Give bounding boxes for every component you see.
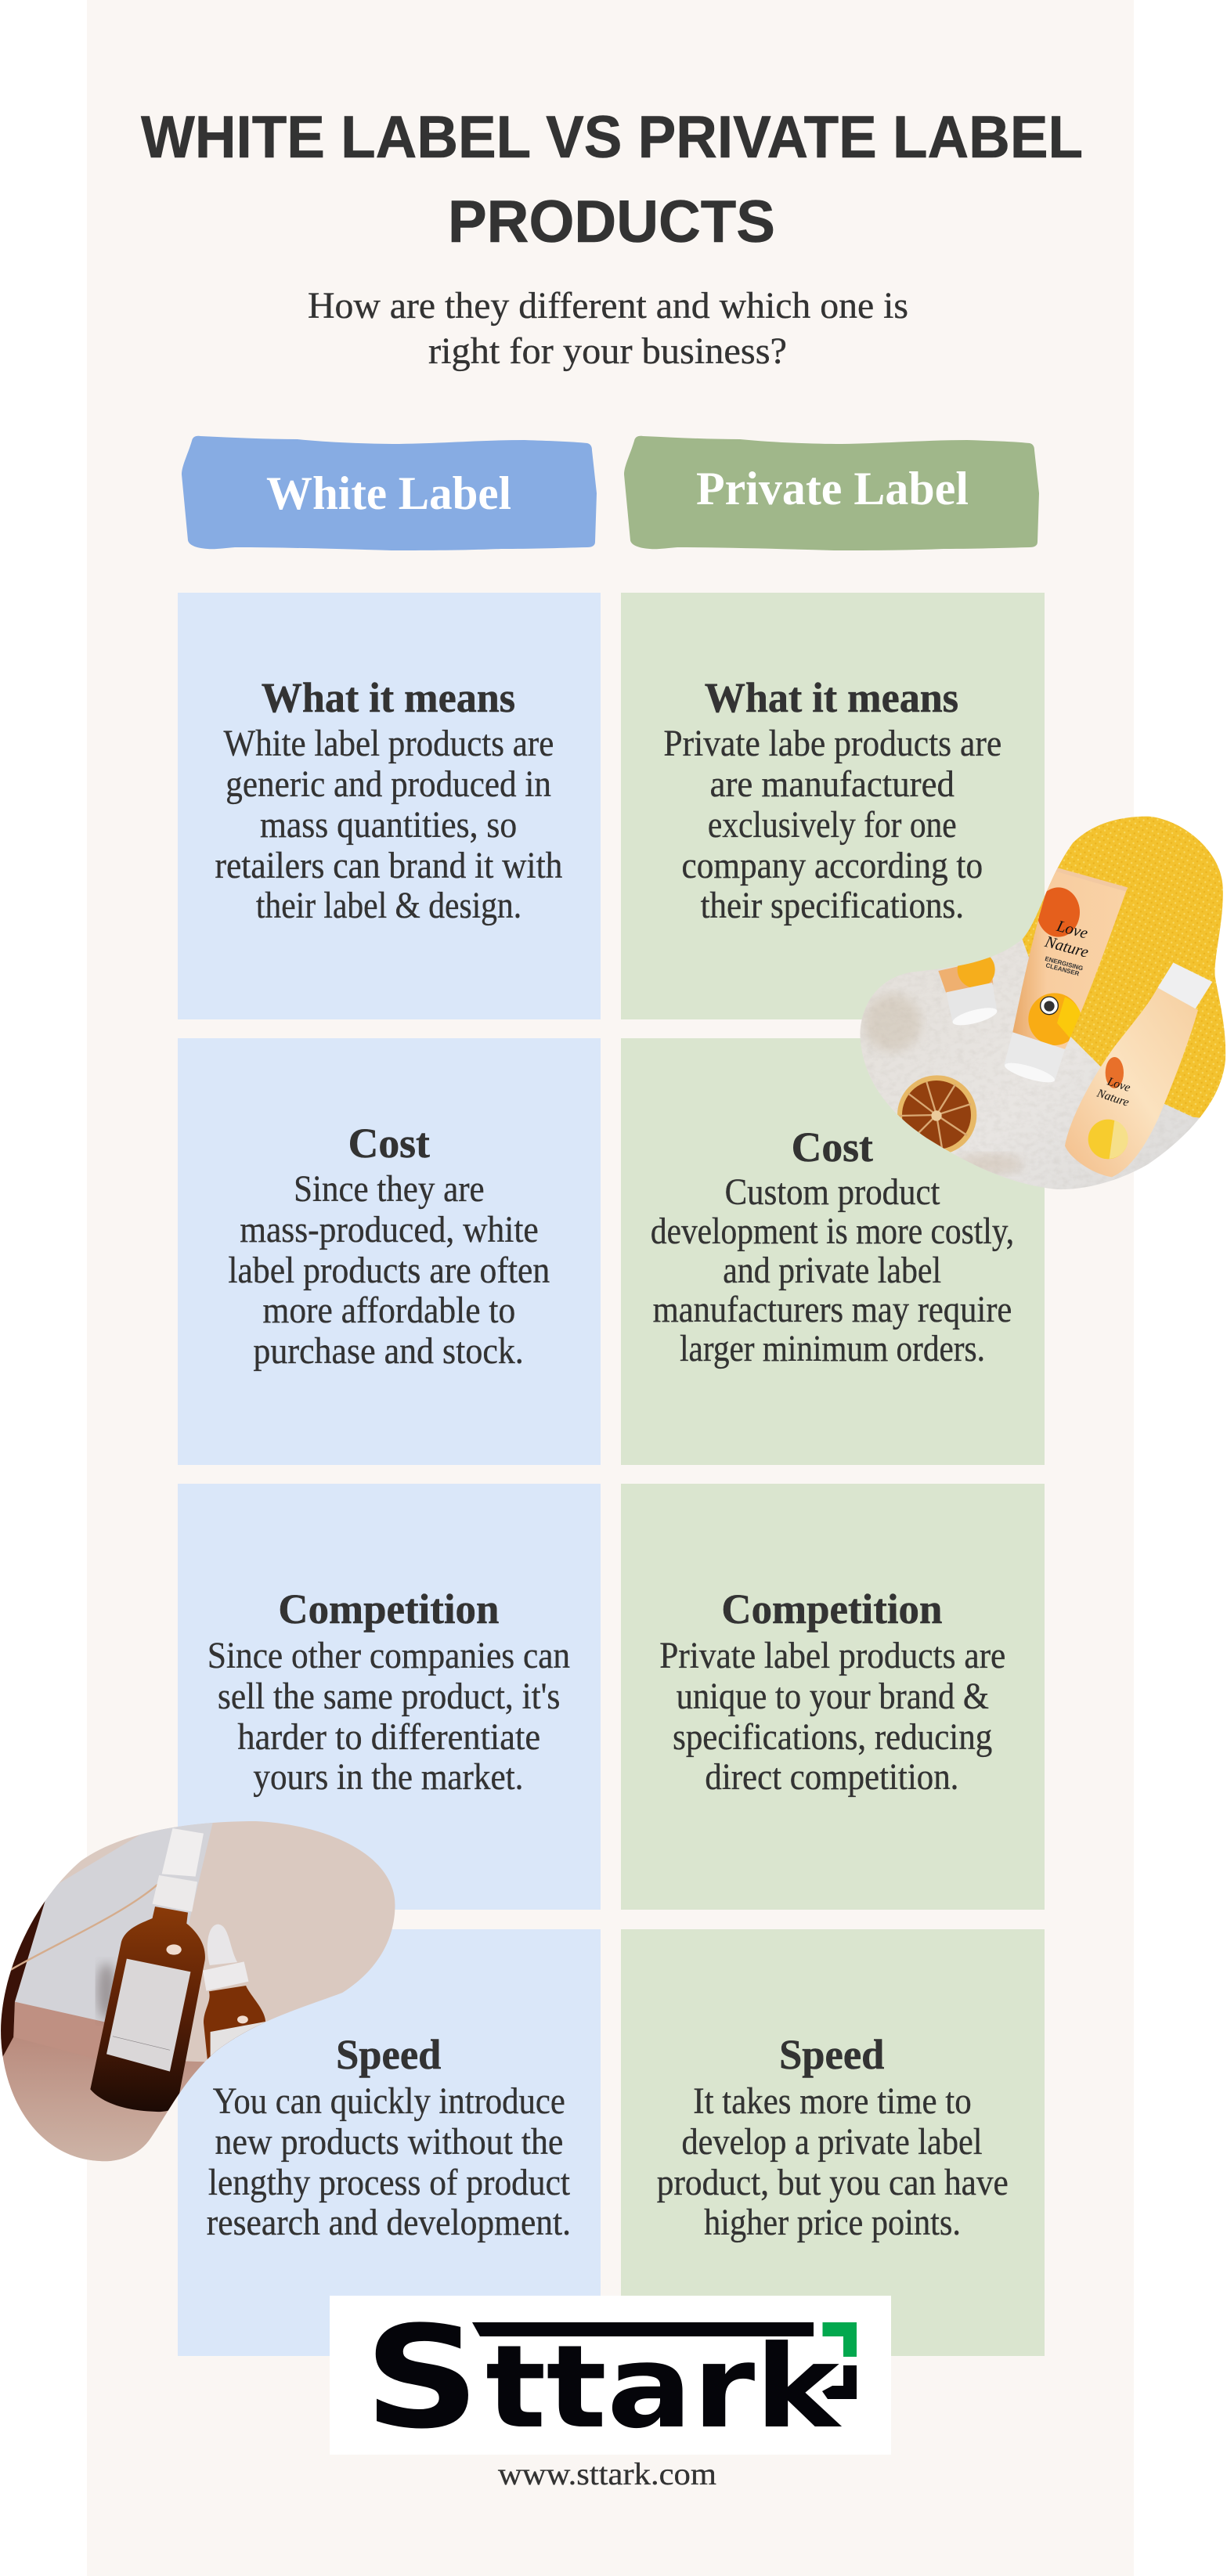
body text: specifications, reducing — [673, 1716, 992, 1758]
body text — [651, 1171, 1014, 1369]
panel: private label, what it means — [621, 593, 1045, 1019]
body text: their label & design. — [256, 885, 521, 926]
body text — [659, 1635, 1005, 1798]
body text: harder to differentiate — [237, 1716, 540, 1758]
body text: mass-produced, white — [240, 1209, 539, 1250]
heading: Speed — [336, 2031, 441, 2078]
body text: development is more costly, — [651, 1210, 1014, 1252]
body text: unique to your brand & — [677, 1676, 989, 1717]
small tube — [938, 957, 998, 1026]
body text: their specifications. — [701, 885, 964, 926]
body text: generic and produced in — [226, 763, 551, 805]
heading: Competition — [278, 1586, 499, 1633]
large tube: Love — [1054, 918, 1090, 943]
body text: product, but you can have — [657, 2162, 1009, 2203]
body text — [208, 1635, 570, 1798]
body text — [207, 2080, 571, 2243]
body text: more affordable to — [263, 1290, 515, 1331]
subtitle: right for your business? — [428, 330, 787, 372]
panel: private label, speed — [621, 1929, 1045, 2356]
heading: Cost — [348, 1120, 430, 1167]
heading: Competition — [721, 1586, 942, 1633]
logo green corner — [822, 2322, 857, 2357]
grey box — [15, 1822, 213, 2026]
header: Private Label — [624, 436, 1039, 550]
header: White Label: White Label — [266, 467, 511, 519]
body text: Custom product — [725, 1171, 940, 1213]
body text: research and development. — [207, 2202, 571, 2243]
panel: white label, speed — [178, 1929, 601, 2356]
table surface — [0, 2033, 205, 2167]
heading: What it means — [262, 674, 515, 721]
logo: S — [364, 2296, 480, 2460]
heading: What it means — [705, 674, 958, 721]
body text: Private labe products are — [663, 723, 1001, 764]
string — [9, 1885, 157, 1971]
body text — [663, 723, 1001, 926]
logo bar — [472, 2322, 814, 2336]
panel: white label, what it means — [178, 593, 601, 1019]
header: Private Label: Private Label — [696, 463, 969, 514]
body text: higher price points. — [704, 2202, 961, 2243]
header: White Label — [182, 436, 597, 550]
body text: direct competition. — [705, 1756, 958, 1798]
body text: lengthy process of product — [208, 2162, 571, 2203]
large tube: ENERGISING — [1044, 955, 1084, 972]
title — [141, 104, 1083, 255]
panel: white label, competition — [178, 1484, 601, 1910]
panel: private label, competition — [621, 1484, 1045, 1910]
body text: sell the same product, it's — [218, 1676, 560, 1717]
body text: purchase and stock. — [253, 1330, 524, 1372]
body text — [215, 723, 562, 926]
body text: and private label — [723, 1250, 941, 1291]
body text: exclusively for one — [708, 804, 957, 846]
body text: Private label products are — [659, 1635, 1005, 1676]
bottle: Nature — [1095, 1086, 1131, 1109]
title: WHITE LABEL VS PRIVATE LABEL — [141, 104, 1083, 171]
body text: Since other companies can — [208, 1635, 570, 1676]
large tube: Nature — [1042, 933, 1090, 961]
logo black corner — [822, 2365, 857, 2399]
spray bottle — [90, 1828, 205, 2112]
subtitle: How are they different and which one is — [308, 285, 908, 327]
body text: are manufactured — [710, 763, 955, 805]
bottle: Love — [1105, 1074, 1132, 1095]
body text: develop a private label — [681, 2121, 982, 2163]
logo — [330, 2296, 891, 2460]
large tube: CLEANSER — [1045, 961, 1080, 977]
heading: Speed — [779, 2031, 884, 2078]
body text — [657, 2080, 1009, 2243]
yellow mat — [1020, 809, 1227, 1122]
body text: retailers can brand it with — [215, 845, 562, 886]
dried orange slice — [897, 1075, 976, 1155]
panel: private label, cost — [621, 1038, 1045, 1465]
small dropper bottle — [203, 1925, 267, 2062]
photo: skincare products on yellow mat — [848, 809, 1227, 1200]
body text: White label products are — [224, 723, 554, 764]
body text: larger minimum orders. — [680, 1328, 985, 1369]
website url: www.sttark.com — [498, 2456, 716, 2491]
subtitle — [308, 285, 908, 372]
logo: ttark — [485, 2321, 842, 2454]
body text: manufacturers may require — [653, 1289, 1012, 1330]
body text: company according to — [681, 845, 983, 886]
large tube — [1003, 867, 1128, 1086]
body text: new products without the — [215, 2121, 563, 2163]
panel: white label, cost — [178, 1038, 601, 1465]
photo: amber dropper bottles — [0, 1817, 405, 2167]
bottle — [1065, 962, 1212, 1177]
heading: Cost — [792, 1124, 873, 1171]
body text: Since they are — [294, 1168, 485, 1210]
body text: You can quickly introduce — [213, 2080, 565, 2122]
body text: mass quantities, so — [260, 804, 517, 846]
body text: It takes more time to — [693, 2080, 972, 2122]
body text: yours in the market. — [253, 1756, 523, 1798]
body text — [228, 1168, 550, 1372]
body text: label products are often — [228, 1250, 550, 1291]
title: PRODUCTS — [448, 189, 775, 255]
